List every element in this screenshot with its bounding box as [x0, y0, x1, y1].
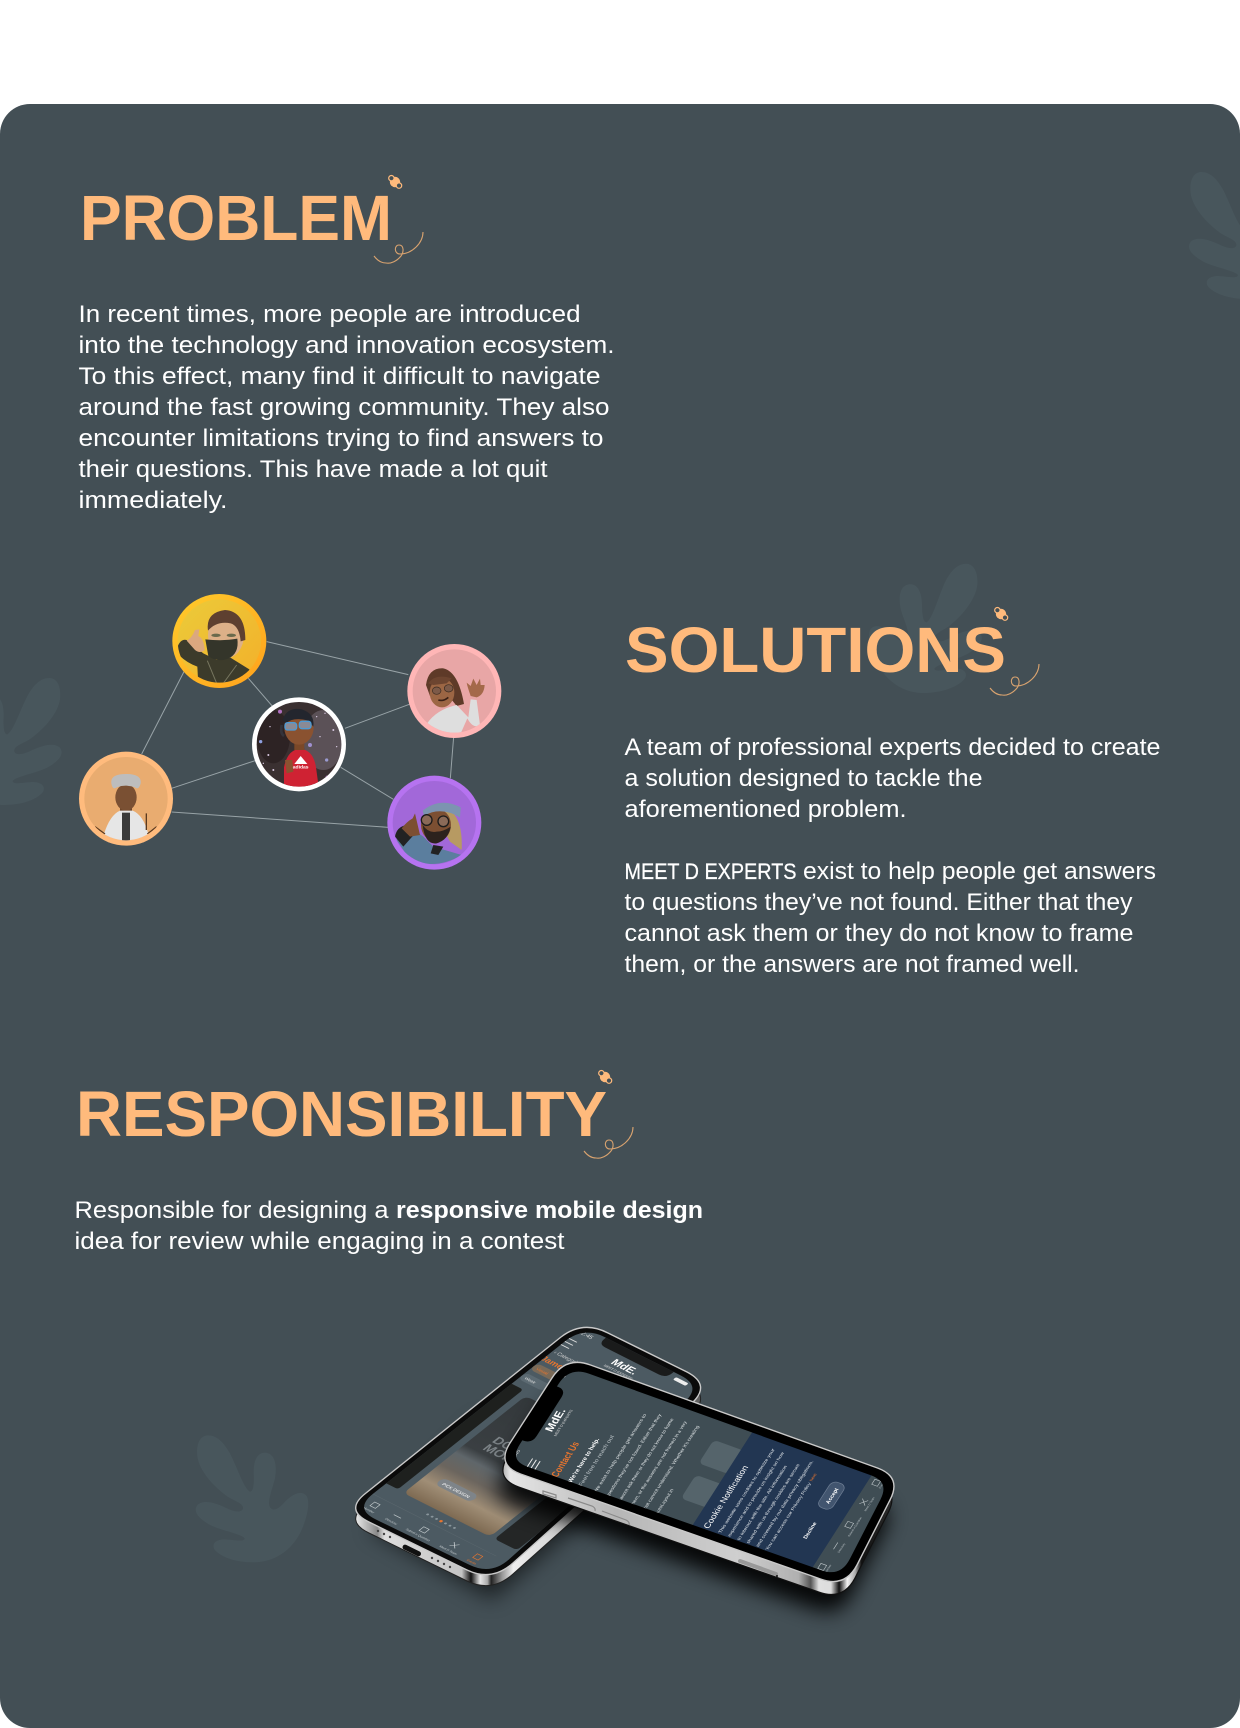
phone: front device, contact and cookie screen: experience and to provide us insight on how	[726, 1451, 786, 1537]
heading: RESPONSIBILITY: RESPONSIBILITY	[76, 1078, 607, 1150]
icon: bee and swirl for PROBLEM	[374, 176, 423, 263]
text block: problem description	[78, 301, 614, 514]
phone: front device, contact and cookie screen: cannot ask them or they do not know to frame	[617, 1417, 675, 1502]
phone: back device, category screen: ‹ Categories	[552, 1350, 583, 1368]
ports on back device	[377, 1530, 451, 1568]
phone: front device, contact and cookie screen: MdE.	[543, 1407, 569, 1433]
phone: front device, contact and cookie screen: Feel free to reach out	[578, 1434, 616, 1487]
text block: solution description: to questions they’ve not found. Either that they	[624, 889, 1133, 916]
avatar: central expert in red hoodie on starry background: adidas	[293, 765, 309, 771]
avatar: woman waving on pink	[407, 644, 501, 738]
phone: front device, contact and cookie screen	[498, 1360, 894, 1612]
text block: solution description	[624, 734, 1160, 978]
side buttons on front device	[543, 1491, 778, 1577]
phone: back device, category screen: 12:45	[576, 1330, 595, 1341]
phone: front device, contact and cookie screen: Submit a Question	[847, 1516, 863, 1537]
text block: problem description: their questions. This have made a lot quit	[78, 456, 548, 483]
phone: back device, category screen: Week	[523, 1376, 538, 1385]
thicker black bezel on front device	[514, 1370, 885, 1574]
phone: front device, contact and cookie screen: 12:45	[510, 1449, 522, 1462]
phone: back device, category screen: Submit a Question	[405, 1528, 431, 1542]
phone: front device, contact and cookie screen: Cookie Notification	[701, 1464, 751, 1530]
icon: bee and swirl for RESPONSIBILITY	[584, 1070, 633, 1158]
phone: back device, category screen: PICK DESIGN	[441, 1482, 471, 1499]
phone: front device, contact and cookie screen: Decline	[803, 1522, 819, 1540]
heading: PROBLEM: PROBLEM	[80, 182, 392, 254]
phone: back device, category screen: James	[538, 1354, 571, 1373]
text block: responsibility description: idea for review while engaging in a contest	[74, 1228, 565, 1255]
text block: problem description: into the technology and innovation ecosystem.	[78, 332, 614, 359]
heading: SOLUTIONS: SOLUTIONS	[625, 614, 1006, 686]
phone: back device, category screen: MdE.	[608, 1358, 641, 1377]
phone: back device, category screen: MORE	[480, 1442, 526, 1469]
decorative leaves	[1010, 676, 1020, 693]
phone: front device, contact and cookie screen: shared with us through cookies are secure	[745, 1463, 801, 1544]
text block: solution description: MEET D EXPERTS	[624, 859, 796, 884]
text block: problem description: around the fast growing community. They also	[78, 394, 610, 421]
phone: front device, contact and cookie screen: Member	[823, 1564, 832, 1574]
text block: responsibility description: Responsible for designing a	[74, 1197, 389, 1224]
network diagram of experts	[79, 594, 501, 870]
text block: solution description: aforementioned problem.	[624, 796, 906, 823]
phone: front device, contact and cookie screen: You can access our Privacy Policy	[764, 1481, 812, 1551]
phone: back device, category screen	[350, 1319, 720, 1600]
phone: back device, category screen: DO	[489, 1434, 518, 1452]
text block: solution description: exist to help people get answers	[803, 858, 1156, 885]
text block: solution description: cannot ask them or they do not know to frame	[624, 920, 1134, 947]
avatar: man with mask on yellow	[172, 594, 266, 688]
connecting lines	[142, 642, 454, 827]
phone: back device, category screen: Meet D Team	[438, 1545, 459, 1556]
icon: bee and swirl for SOLUTIONS	[990, 608, 1039, 695]
phone: front device, contact and cookie screen: Directory	[836, 1542, 847, 1553]
text block: responsibility description: responsive mobile design	[396, 1197, 703, 1224]
phone: front device, contact and cookie screen: We exist to help people get answers to	[593, 1413, 648, 1493]
text block: problem description: To this effect, many find it difficult to navigate	[78, 363, 600, 390]
phone: front device, contact and cookie screen: here	[808, 1472, 818, 1482]
phone: front device, contact and cookie screen: This website uses cookies to optimize your	[717, 1447, 776, 1534]
text block: problem description: encounter limitations trying to find answers to	[78, 425, 604, 452]
phone mockups	[350, 1319, 894, 1612]
phone: front device, contact and cookie screen: that cannot understand. Whether it’s creating	[641, 1425, 700, 1511]
phone: back device, category screen: Member	[362, 1506, 376, 1514]
phone: back device, category screen: MEET D EXPERTS	[602, 1364, 634, 1381]
phone: front device, contact and cookie screen: to interact with the site. All information	[736, 1464, 788, 1541]
phone: front device, contact and cookie screen: Accept	[825, 1487, 841, 1505]
text block: responsibility description	[74, 1197, 703, 1255]
phone: back device, category screen: Directory	[384, 1517, 399, 1526]
phone: front device, contact and cookie screen: Meet D Team	[863, 1496, 876, 1512]
text block: problem description: In recent times, more people are introduced	[78, 301, 580, 328]
phone: back device, category screen: Visual	[535, 1367, 550, 1375]
avatar: man in white coat on orange	[79, 752, 173, 846]
phone: front device, contact and cookie screen: them, or the answers are not framed in a very	[629, 1420, 688, 1506]
text block: solution description: A team of professional experts decided to create	[624, 734, 1160, 761]
text block: problem description: immediately.	[78, 487, 228, 514]
phone: front device, contact and cookie screen: Contact Us	[550, 1440, 582, 1479]
phone: front device, contact and cookie screen: Events	[878, 1480, 886, 1489]
phone: front device, contact and cookie screen: questions they’ve not found. Either that they	[605, 1413, 663, 1498]
phone: front device, contact and cookie screen: and covered by our data privacy obligations.	[755, 1460, 814, 1547]
phone: back device, category screen: Events	[466, 1559, 478, 1566]
phone: front device, contact and cookie screen: We’re here to help.	[568, 1437, 602, 1484]
avatar: bearded man with scarf on purple	[387, 776, 481, 870]
avatar: central expert in red hoodie on starry background	[252, 697, 346, 792]
text block: solution description: them, or the answers are not framed well.	[624, 951, 1080, 978]
text block: solution description: a solution designed to tackle the	[624, 765, 982, 792]
phone: front device, contact and cookie screen: MEET D EXPERTS	[553, 1409, 574, 1437]
phone: front device, contact and cookie screen: AutoLayout in	[654, 1488, 675, 1515]
